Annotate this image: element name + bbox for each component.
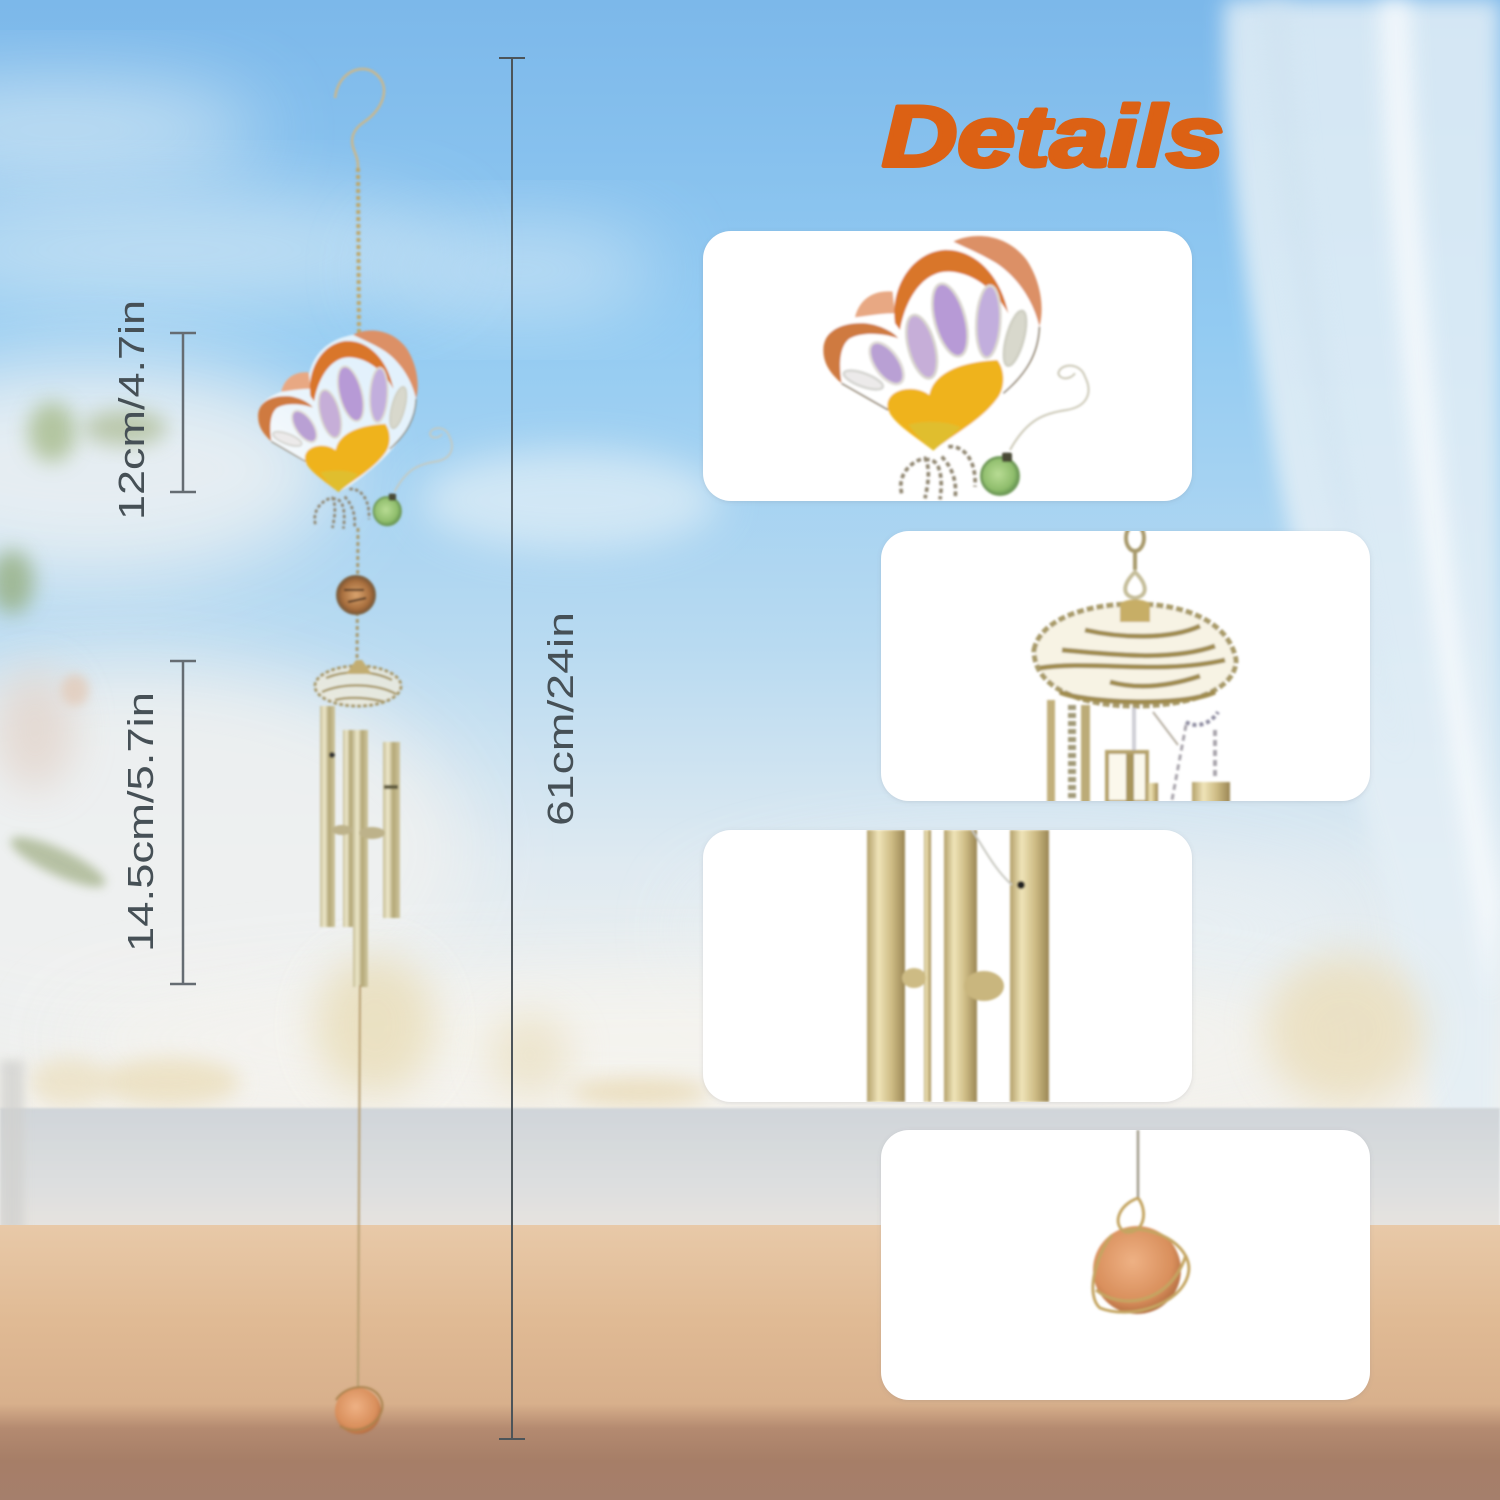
icon: hook [335,69,384,168]
lower bead [335,1387,382,1434]
panel: cap detail [881,525,1370,805]
panel: butterfly detail [703,231,1192,501]
dimension: 61cm/24in [499,58,581,1439]
blurred plants [28,402,76,462]
dimension: 14.5cm/5.7in: 14.5cm/5.7in [120,692,161,952]
connector and upper bead [337,528,375,662]
chime tubes [320,706,400,987]
hanging chain [358,168,359,335]
curtain [1224,0,1500,1150]
panel: bead detail [881,1130,1370,1400]
panel: tubes detail [703,830,1192,1102]
title: Details [882,89,1224,185]
chime cap [315,660,401,706]
dimension: 12cm/4.7in: 12cm/4.7in [111,300,152,520]
butterfly [258,331,452,529]
bead close-up [1093,1130,1189,1314]
wind chime product [258,69,452,1434]
dimension: 14.5cm/5.7in [120,661,196,984]
dimension: 61cm/24in: 61cm/24in [540,612,581,826]
butterfly close-up [823,236,1089,499]
tubes close-up [867,830,1049,1102]
long string [358,985,360,1390]
dimension: 12cm/4.7in [111,300,196,520]
wire cap close-up [1034,525,1236,805]
